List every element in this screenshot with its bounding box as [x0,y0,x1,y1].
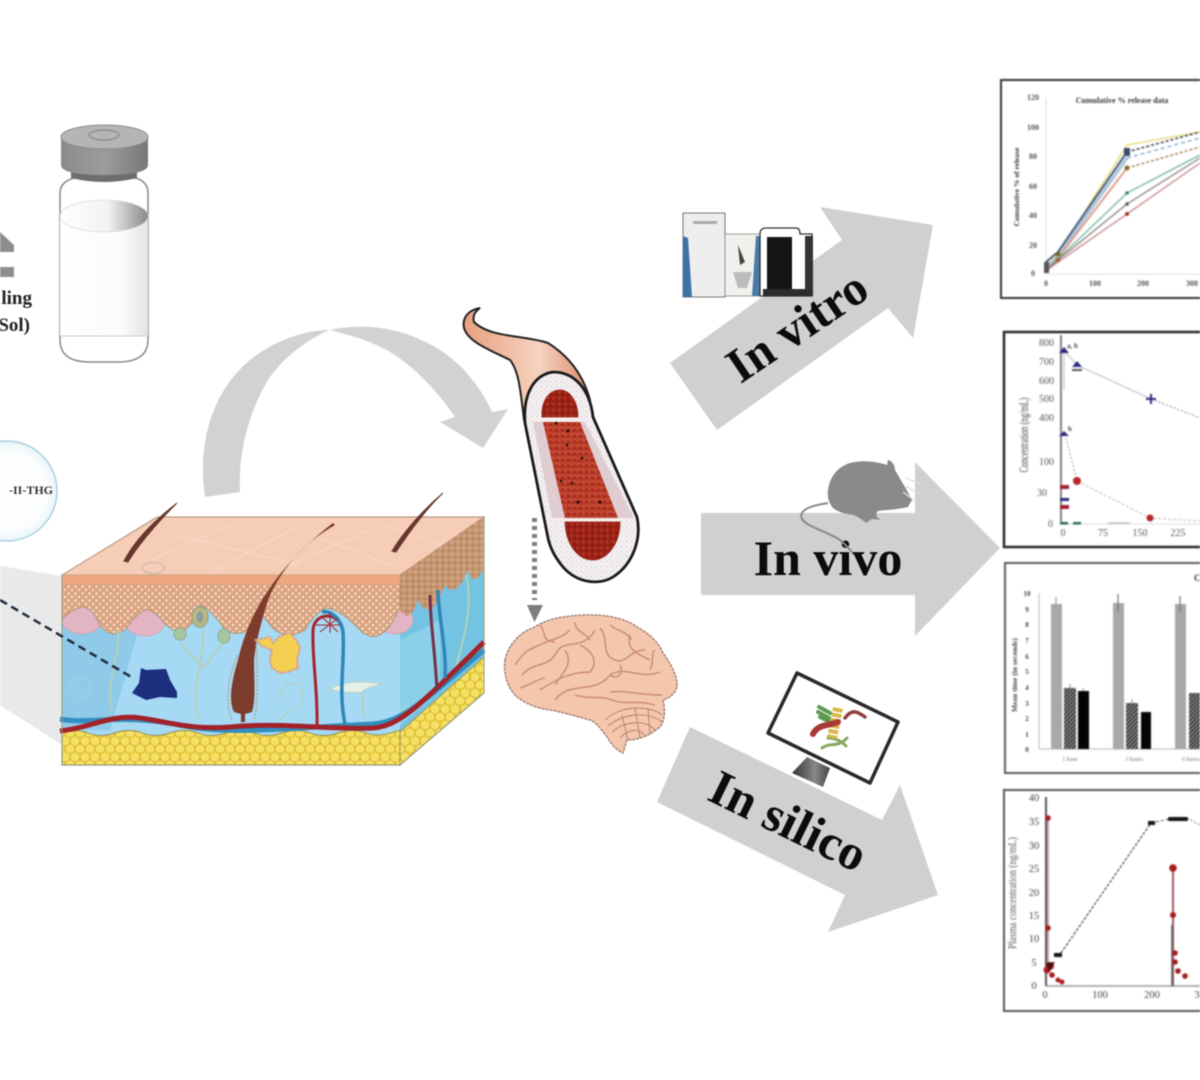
x axis: 0 [1042,990,1048,1001]
x axis: 0 [1060,528,1066,539]
y axis: 2 [1025,715,1029,723]
significance marks: b [1068,425,1072,433]
sweat gland [330,682,382,693]
y axis: 100 [1027,123,1039,132]
skin top creases [150,525,440,570]
y axis: 20 [1029,888,1039,899]
y axis: 120 [1027,93,1039,102]
y axis: 30 [1037,488,1047,499]
bars group 2 [1113,594,1151,749]
y axis: 80 [1029,152,1037,161]
dermis front [62,600,400,740]
y axis: 10 [1029,934,1039,945]
panel: cumulative release chart [1001,80,1200,298]
x axis [1042,986,1200,1001]
black series [1054,817,1200,957]
y axis: 100 [1039,457,1054,468]
y axis: 25 [1029,864,1039,875]
illustration: skin block [60,493,484,765]
blood vessels [60,590,484,731]
significance marks [1067,342,1078,433]
large hair follicle [231,523,335,722]
axes [1039,593,1200,749]
x labels: 1 hour [1062,757,1078,763]
fat front [62,730,400,765]
y axis: 6 [1025,653,1029,661]
y axis: 30 [1029,841,1039,852]
y axis [1027,93,1039,278]
y axis: 0 [1025,746,1029,754]
illustration: brain [504,615,677,753]
y axis: 8 [1025,621,1029,629]
pale glands and nerves [110,575,469,720]
illustration: blood vessel [464,308,638,582]
y axis: 400 [1039,413,1054,424]
x labels: 6 hours [1182,757,1200,763]
significance marks: a, b [1067,342,1078,350]
y axis: 35 [1029,817,1039,828]
y axis: 40 [1029,793,1039,804]
x axis: 300 [1186,279,1198,288]
y axis: 5 [1025,668,1029,676]
y axis: 0 [1031,981,1037,992]
bars group 1 [1051,597,1089,749]
y axis: 10 [1024,590,1031,598]
release markers [1044,148,1130,273]
x axis [1044,98,1200,288]
y axis: 5 [1031,958,1037,969]
y axis: 60 [1029,182,1037,191]
y axis [1037,335,1200,530]
epidermis right face [400,517,484,616]
label: gelling sol [0,288,32,336]
x axis: 100 [1092,990,1108,1001]
label: in vitro: In vitro [716,259,878,393]
small hair left [124,503,177,562]
x axis: 200 [1144,990,1160,1001]
skin top face [62,517,484,575]
y axis: 700 [1039,357,1054,368]
polymer circle [0,441,57,541]
icon: mouse [801,460,922,552]
arrow: in vivo [701,462,1000,636]
y axis title: Cumulative % of release [1012,147,1021,226]
y axis title: Plasma concentration (ng/mL) [1005,837,1019,949]
y axis: 15 [1029,911,1039,922]
small hair right [392,493,443,552]
dermis right face [400,535,484,735]
arrow: in silico [657,727,938,932]
y axis: 9 [1025,606,1029,614]
y axis: 1 [1025,731,1029,739]
y axis title: Concentration (ng/mL) [1016,398,1031,472]
label: in vivo: In vivo [754,530,902,586]
y axis: 0 [1031,269,1035,278]
y axis: 800 [1039,338,1054,349]
y axis title: Mean time (in seconds) [1010,638,1019,712]
drug depot [132,668,177,700]
markers [1059,347,1156,524]
panel: concentration chart [1004,332,1200,547]
panel: bar chart [1005,563,1200,773]
icon: vial [60,125,148,362]
curved arrow: skin to blood [203,327,508,497]
label: gelling sol: ling [1,288,32,309]
x labels [1062,757,1200,763]
y axis [1029,793,1039,992]
fat right face [400,657,484,765]
sebaceous gland [256,633,300,673]
axis line and spikes [1046,797,1173,986]
y axis: 500 [1039,394,1054,405]
y axis: 7 [1025,637,1029,645]
icon: dissolution instrument [683,213,813,297]
y axis: 0 [1048,519,1053,530]
arrow: in vitro [670,207,933,430]
gelling equilibrium arrows [0,232,14,277]
dotted arrow: blood to brain [527,518,543,622]
x axis: 3 [1194,990,1200,1001]
gland cluster [174,607,230,643]
series lines [1064,351,1200,523]
panel: plasma concentration chart [1004,790,1200,1011]
y axis: 40 [1029,211,1037,220]
polymer circle: -II-THG [9,483,53,497]
chart title: Cumulative % release data [1076,96,1168,105]
x axis: 100 [1089,279,1101,288]
x axis [1060,528,1186,539]
icon: computer monitor with protein [768,673,898,787]
x axis: 200 [1137,279,1149,288]
x labels: 3 hours [1125,757,1144,763]
y axis: 600 [1039,376,1054,387]
x axis: 0 [1044,279,1048,288]
x axis: 225 [1170,528,1186,539]
papillae [62,606,413,636]
epidermis front [62,575,400,636]
skin outline [62,517,484,765]
protein structure [813,707,865,748]
y axis: 3 [1025,700,1029,708]
zoom cone from circle to skin [0,566,62,745]
label: in silico: In silico [701,759,876,883]
y axis: 20 [1029,241,1037,250]
release lines [1046,132,1200,271]
y axis: 4 [1025,684,1029,692]
x axis: 150 [1132,528,1148,539]
bars group 3 [1175,596,1200,749]
y axis [1024,590,1031,754]
red series [1044,815,1188,984]
dashed pointer line [0,600,133,678]
x axis: 75 [1098,528,1108,539]
